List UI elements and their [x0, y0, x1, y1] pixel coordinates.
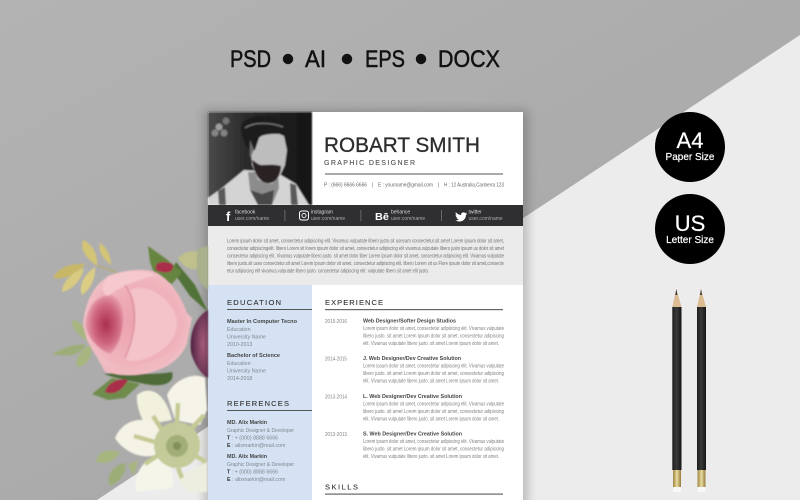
job 4: 2013-2013	[325, 432, 347, 438]
job title: GRAPHIC DESIGNER	[324, 160, 415, 167]
facebook: f	[226, 209, 231, 224]
twitter: twitter	[468, 210, 482, 216]
job 2: libero justo. sit amet Lorem ipsum dolor sit amet, consectetur adipiscing	[363, 371, 504, 377]
education entries: 2014-2018	[227, 376, 252, 382]
behance: Bē	[375, 211, 389, 223]
education entries: Master In Computer Tecno	[227, 319, 297, 325]
contact details: E : yourname@gmail.com	[378, 182, 433, 188]
behance: user.com/name	[391, 216, 425, 222]
job 2: J. Web Designer/Dev Creative Solution	[363, 356, 461, 362]
education heading: EDUCATION	[227, 298, 281, 307]
pencil left	[672, 289, 682, 492]
contact details: H : 12 Australia,Canberra 123	[444, 182, 504, 188]
job 1: libero justo. sit amet Lorem ipsum dolor sit amet, consectetur adipiscing	[363, 334, 504, 340]
plum flower	[191, 310, 208, 378]
job 1: Web Designer/Softer Design Studios	[363, 318, 456, 324]
behance	[375, 210, 425, 223]
education entries: 2010-2013	[227, 342, 252, 348]
pencils	[672, 289, 706, 492]
green leaves	[52, 246, 208, 486]
education entries: University Name	[227, 368, 266, 374]
job 4: S. Web Designer/Dev Creative Solution	[363, 432, 462, 438]
contact details: P : (666) 6666 6666	[324, 182, 367, 188]
job 4	[325, 432, 504, 460]
rose buds	[92, 262, 173, 400]
summary band: consectetur adipiscing elit. Vivamus vulputate libero justo. sit amet dolor liber Lorem ipsum dolor sit amet, consectetur adipiscing elit. Vivamus vulputate	[227, 254, 504, 260]
summary band: Lorem ipsum dolor sit amet, consectetur adipiscing elit. Vivamus vulputate libero justo.sit usesam consectetur.sit amet Lorem ipsum dolor sit amet,	[227, 238, 504, 244]
job 3: L. Web Designer/Dev Creative Solution	[363, 394, 462, 400]
education entries: University Name	[227, 334, 266, 340]
facebook: facebook	[235, 210, 256, 216]
badge: US letter size	[655, 194, 725, 264]
skills heading: SKILLS	[325, 482, 358, 492]
summary band: libero justo.sit uses consectetur.sit amet Lorem ipsum dolor sit amet, consectetur adipiscing elit. libero Lorem sit us Flore ipsum dolor sit amet,consecte	[227, 261, 504, 267]
job 4: elit. Vivamus vulputate libero justo. sit amet Lorem ipsum dolor sit amet.	[363, 454, 499, 460]
instagram: user.com/name	[311, 216, 345, 222]
format heading: PSD	[230, 46, 271, 73]
job 2: Lorem ipsum dolor sit amet, consectetur adipiscing elit. Vivamus vulputate	[363, 364, 504, 370]
contact details	[324, 182, 504, 188]
format heading: AI	[305, 46, 326, 73]
education entries: Bachelor of Science	[227, 353, 281, 359]
facebook: user.com/name	[235, 216, 269, 222]
resume sheet	[208, 112, 523, 500]
job 3: 2013-2014	[325, 394, 347, 400]
instagram: instagram	[311, 210, 333, 216]
facebook	[226, 209, 269, 224]
pencil right	[697, 289, 706, 492]
education entries: Education	[227, 327, 251, 333]
portrait photo	[208, 112, 312, 205]
white flower	[115, 376, 207, 493]
job 4: Lorem ipsum dolor sit amet, consectetur adipiscing elit. Vivamus vulputate	[363, 439, 504, 445]
job 2: 2014-2015	[325, 356, 347, 362]
reference entries: E : alixmarkin@mail.com	[227, 477, 286, 483]
reference entries: MD. Alix Markin	[227, 420, 267, 426]
badge: A4 paper size: A4	[677, 128, 703, 153]
format heading: DOCX	[438, 46, 500, 73]
badge: US letter size: US	[675, 211, 705, 236]
yellow leaves	[53, 240, 119, 295]
format heading: EPS	[365, 46, 405, 73]
reference entries: T : + (000) 8888 6666	[227, 436, 278, 442]
badge: US letter size: Letter Size	[666, 235, 714, 246]
job 1: elit. Vivamus vulputate libero justo. sit amet Lorem ipsum dolor sit amet.	[363, 341, 499, 347]
job 2	[325, 356, 504, 384]
job 3	[325, 394, 504, 422]
job 1	[325, 318, 504, 347]
summary band	[208, 226, 523, 285]
reference entries	[227, 420, 294, 483]
job 2: elit. Vivamus vulputate libero justo. sit amet Lorem ipsum dolor sit amet.	[363, 378, 499, 384]
reference entries: T : + (000) 8888 6666	[227, 470, 278, 476]
education entries	[227, 319, 297, 382]
reference entries: Graphic Designer & Developer	[227, 428, 294, 434]
behance: behance	[391, 210, 410, 216]
left column	[208, 285, 312, 500]
contact details: |	[438, 182, 439, 188]
twitter	[456, 210, 503, 222]
flower bouquet	[52, 240, 208, 493]
experience heading: EXPERIENCE	[325, 298, 383, 307]
job 1: Lorem ipsum dolor sit amet, consectetur adipiscing elit. Vivamus vulputate	[363, 326, 504, 332]
education entries: Education	[227, 361, 251, 367]
instagram	[300, 210, 345, 222]
job 3: Lorem ipsum dolor sit amet, consectetur adipiscing elit. Vivamus vulputate	[363, 402, 504, 408]
paper shadow	[204, 110, 528, 500]
badge: A4 paper size	[655, 112, 725, 182]
job 1: 2015-2016	[325, 319, 347, 325]
reference entries: E : alixmarkin@mail.com	[227, 443, 286, 449]
format heading	[230, 46, 500, 73]
name: ROBART SMITH	[324, 134, 480, 157]
twitter: user.com/name	[468, 216, 503, 222]
reference entries: Graphic Designer & Developer	[227, 462, 294, 468]
pink rose	[83, 270, 192, 375]
job 4: libero justo. sit amet Lorem ipsum dolor sit amet, consectetur adipiscing	[363, 446, 504, 452]
reference entries: MD. Alix Markin	[227, 454, 267, 460]
references heading: REFERENCES	[227, 399, 289, 408]
badge: A4 paper size: Paper Size	[666, 152, 715, 163]
experience section	[325, 298, 504, 495]
summary band: consectetur adipiscingelit. libero Lorem sit lorem ipsum dolor sit amet, consectetur adipiscing elit vivamus.vulputate libero justo ipsum us dolor sit amet	[227, 246, 505, 252]
summary band: etur adipiscing elit vivamus.vulputate libero justo. consectetur adipiscing elit. vulputate libero sit amet elit justo.	[227, 268, 429, 274]
social bar	[208, 205, 523, 226]
job 3: elit. Vivamus vulputate libero justo. sit amet Lorem ipsum dolor sit amet.	[363, 416, 499, 422]
contact details: |	[372, 182, 373, 188]
job 3: libero justo. sit amet Lorem ipsum dolor sit amet, consectetur adipiscing	[363, 409, 504, 415]
